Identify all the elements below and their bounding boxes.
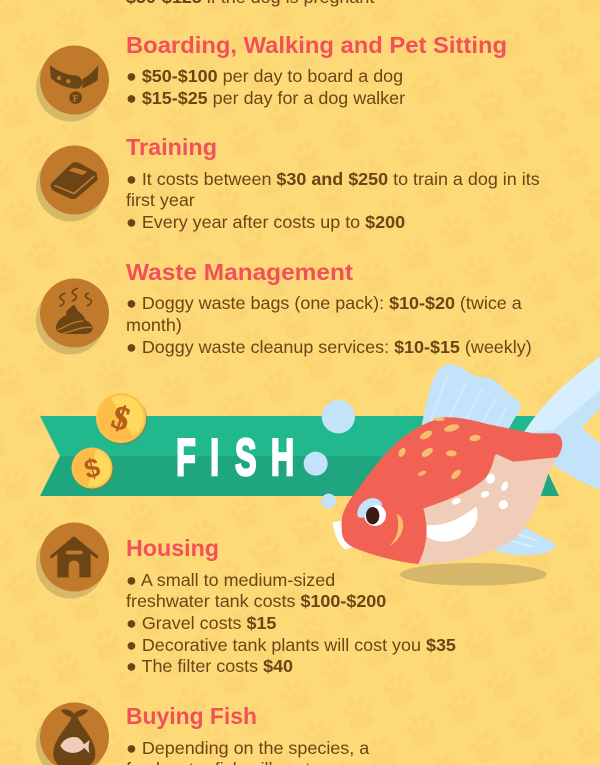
heading: housing: Housing [126, 535, 219, 561]
illustration: goldfish [304, 357, 600, 586]
text: boarding details: $15-$25 per day for a dog walker [142, 88, 405, 108]
coin: lower: $ [81, 452, 103, 485]
coin: upper [96, 393, 148, 445]
tail [523, 357, 600, 490]
panel: buying fish [36, 702, 369, 765]
panel: housing [36, 522, 456, 676]
panel: waste management [36, 259, 532, 357]
dorsal fin [422, 364, 521, 429]
text: waste details: ● Doggy waste bags (one pack): $10-$20 (twice a [126, 293, 522, 313]
text: waste details: ● Doggy waste cleanup services: [126, 337, 394, 357]
panel: training [36, 134, 540, 232]
text: boarding details: ● $50-$100 per day to board a dog [126, 66, 403, 86]
text: housing details: ● Decorative tank plants will cost you [126, 635, 426, 655]
lower fin [490, 522, 555, 555]
panel: boarding, walking and pet sitting [36, 32, 507, 122]
banner: fish [40, 393, 559, 496]
heading: buying fish: Buying Fish [126, 703, 257, 729]
text: housing details: ● Gravel costs [126, 613, 246, 633]
text: training details: first year [126, 190, 195, 210]
text: training details: $200 [365, 212, 405, 232]
coin: upper: $ [107, 399, 134, 439]
heading: training: Training [126, 134, 217, 160]
body [342, 417, 562, 564]
text: housing details: $15 [246, 613, 276, 633]
eye [357, 498, 386, 526]
text: housing details: $35 [426, 635, 456, 655]
icon: dog house [36, 522, 109, 598]
cheek [389, 514, 403, 546]
icon: dog collar [36, 46, 109, 122]
text: training details: ● It costs between $30 and $250 to train a dog in its [126, 169, 540, 189]
text: waste details: $10-$15 (weekly) [394, 337, 532, 357]
text: boarding details: ● [126, 88, 142, 108]
text: training details: ● Every year after costs up to [126, 212, 365, 232]
lip [333, 520, 355, 549]
gill [427, 507, 478, 542]
heading: waste management: Waste Management [126, 259, 353, 285]
bubbles [304, 400, 355, 508]
belly [418, 453, 557, 564]
belly spots [451, 472, 510, 511]
banner title: FISH [176, 429, 294, 487]
spots [397, 418, 481, 481]
icon: book [36, 146, 109, 222]
icon: dog collar: F [73, 94, 79, 104]
text: housing details: freshwater tank costs [126, 591, 300, 611]
coin: lower [72, 448, 114, 490]
text: buying details: ● Depending on the species, a [126, 738, 369, 758]
text: housing details: $100-$200 [300, 591, 386, 611]
ribbon [40, 416, 559, 496]
icon: fish in a bag [36, 702, 109, 765]
text: waste details: month) [126, 315, 182, 335]
shadow [400, 563, 547, 586]
text: housing details: $40 [263, 656, 293, 676]
heading: boarding: Boarding, Walking and Pet Sitting [126, 32, 507, 58]
text: housing details: ● A small to medium-sized [126, 570, 335, 590]
text: housing details: ● The filter costs [126, 656, 263, 676]
icon: poop [36, 278, 109, 354]
